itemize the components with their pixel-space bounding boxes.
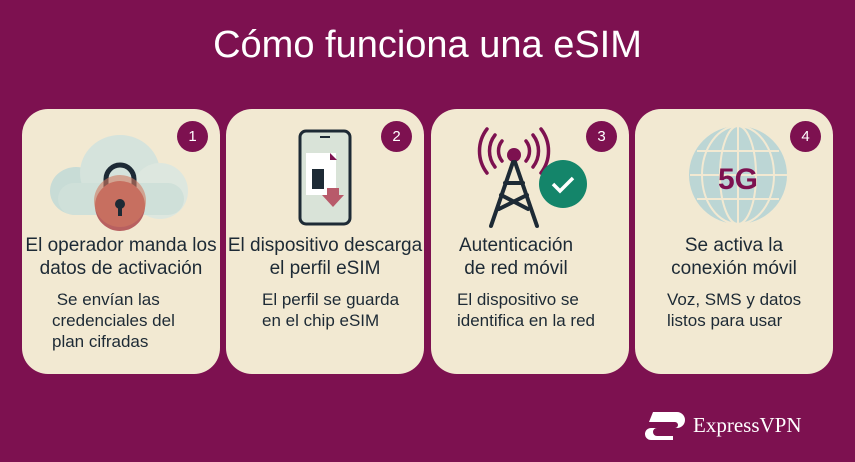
heading: El operador manda los	[25, 235, 217, 256]
heading: el perfil eSIM	[270, 258, 380, 279]
logo: ExpressVPN	[645, 412, 802, 440]
description: El dispositivo se	[457, 290, 579, 309]
number badge 4	[790, 121, 821, 152]
heading: conexión móvil	[671, 258, 797, 279]
heading: Se activa la	[685, 235, 783, 256]
description: credenciales del	[52, 311, 175, 330]
icon: phone with SIM download	[298, 130, 352, 226]
heading: datos de activación	[40, 258, 202, 279]
description	[667, 290, 801, 330]
heading	[25, 235, 217, 279]
heading: El dispositivo descarga	[228, 235, 422, 256]
panel: step 3	[431, 109, 629, 374]
description: plan cifradas	[52, 332, 148, 351]
icon: globe with 5G: 5G	[718, 163, 758, 196]
icon: globe with 5G	[689, 127, 787, 223]
number badge 3: 3	[597, 128, 606, 145]
number badge 4: 4	[801, 128, 810, 145]
description: en el chip eSIM	[262, 311, 379, 330]
heading	[228, 235, 422, 279]
number badge 2	[381, 121, 412, 152]
number badge 1: 1	[188, 128, 197, 145]
logo: ExpressVPN: ExpressVPN	[693, 413, 802, 437]
heading	[671, 235, 797, 279]
heading	[459, 235, 573, 279]
number badge 3	[586, 121, 617, 152]
heading: de red móvil	[464, 258, 568, 279]
description: listos para usar	[667, 311, 782, 330]
description: identifica en la red	[457, 311, 595, 330]
icon: cloud with lock	[50, 135, 188, 231]
panel: step 2	[226, 109, 424, 374]
description	[52, 290, 175, 351]
title: Cómo funciona una eSIM	[213, 24, 642, 66]
icon: antenna tower with check	[478, 127, 587, 228]
description	[457, 290, 595, 330]
description: Voz, SMS y datos	[667, 290, 801, 309]
panel: step 4	[635, 109, 833, 374]
panel: step 1	[22, 109, 220, 374]
description: Se envían las	[57, 290, 160, 309]
number badge 1	[177, 121, 208, 152]
description	[262, 290, 400, 330]
description: El perfil se guarda	[262, 290, 399, 309]
number badge 2: 2	[392, 128, 401, 145]
heading: Autenticación	[459, 235, 573, 256]
